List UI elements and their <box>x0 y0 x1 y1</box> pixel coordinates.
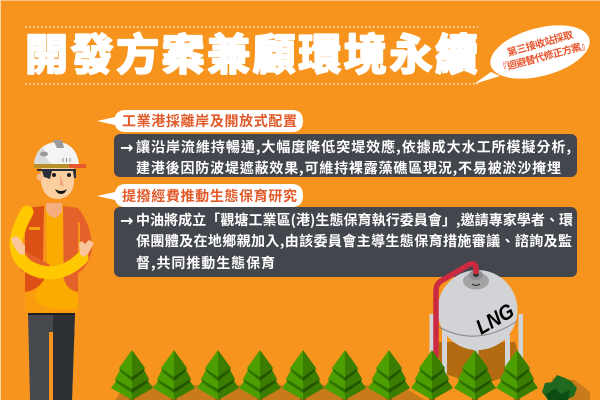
callout: third terminal alternative plan: 『迴避替代修正方案』 <box>496 36 592 75</box>
panel: offshore port details: 建港後因防波堤遮蔽效果,可維持裸露藻礁區現況,不易被淤沙掩埋 <box>136 158 561 178</box>
shirt hem <box>25 285 78 313</box>
heading pill: ecological funding: 提撥經費推動生態保育研究 <box>122 186 297 206</box>
vest left panel <box>25 206 44 292</box>
panel: ecological funding details <box>114 207 577 277</box>
icon: red pipe <box>436 264 476 358</box>
panel: offshore port details: 讓沿岸流維持暢通,大幅度降低突堤效應,依據成大水工所模擬分析, <box>136 137 571 157</box>
panel: ecological funding details: 督,共同推動生態保育 <box>136 253 275 273</box>
title: 開發方案兼顧環境永續 <box>25 21 478 83</box>
vest right panel <box>63 206 92 292</box>
face <box>41 168 74 199</box>
folded arms <box>16 212 82 273</box>
LNG label: LNG <box>472 299 518 339</box>
shirt <box>35 206 78 309</box>
panel: ecological funding details: 中油將成立「觀塘工業區(港)生態保育執行委員會」,邀請專家學者、環 <box>136 210 573 230</box>
panel: offshore port details <box>114 134 577 178</box>
heading pill: offshore port: 工業港採離岸及開放式配置 <box>122 111 297 131</box>
trousers <box>28 313 75 400</box>
ground shadow <box>115 385 425 400</box>
callout: third terminal alternative plan <box>474 16 595 88</box>
row of trees <box>111 350 538 400</box>
icon: hard hat <box>34 142 79 164</box>
panel: offshore port details: → <box>120 138 133 157</box>
icon: shrub <box>542 375 590 400</box>
callout: third terminal alternative plan: 第三接收站採取 <box>505 26 575 59</box>
icon: LNG tank <box>430 264 523 386</box>
hands <box>11 236 25 255</box>
neck <box>46 203 62 218</box>
worker character <box>11 140 94 400</box>
panel: ecological funding details: → <box>120 211 133 230</box>
panel: ecological funding details: 保團體及在地鄉親加入,由該委員會主導生態保育措施審議、諮詢及監 <box>136 231 572 251</box>
